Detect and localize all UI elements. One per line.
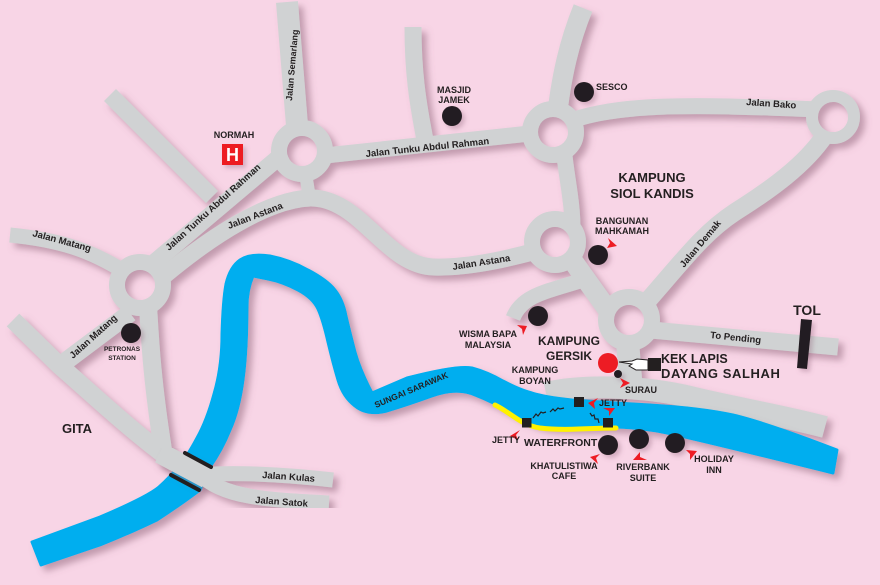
road labels: Jalan Tunku Abdul Rahman [164, 162, 263, 253]
road labels: Jalan Matang [31, 228, 92, 255]
place labels: INN [706, 465, 722, 475]
bridge road and Jalan Kulas / Jalan Satok [160, 453, 333, 503]
road labels: SUNGAI SARAWAK [373, 369, 450, 410]
hospital icon [222, 144, 243, 165]
place labels: JETTY [492, 435, 520, 445]
place labels: WISMA BAPA [459, 329, 517, 339]
place labels: MAHKAMAH [595, 226, 649, 236]
place labels: SUITE [630, 473, 656, 483]
place labels: KAMPUNG [618, 170, 686, 185]
place labels: DAYANG SALHAH [661, 366, 781, 381]
place labels: CAFE [552, 471, 576, 481]
road labels: Jalan Satok [255, 495, 309, 510]
TOL gate [793, 302, 821, 369]
road labels: Jalan Astana [452, 253, 512, 273]
waterfront yellow promenade [495, 405, 616, 429]
place labels: KAMPUNG [512, 365, 558, 375]
place labels: MALAYSIA [465, 340, 512, 350]
bridge lines [171, 453, 211, 490]
place labels: BOYAN [519, 376, 551, 386]
landmark dots [121, 82, 685, 455]
road labels: Jalan Kulas [262, 470, 315, 485]
road network [10, 2, 854, 463]
road labels: Jalan Demak [678, 218, 724, 270]
hospital icon: H [226, 145, 239, 165]
place labels: MASJID [437, 85, 471, 95]
place labels: KHATULISTIWA [530, 461, 598, 471]
place labels: GITA [62, 421, 93, 436]
road labels: Jalan Tunku Abdul Rahman [365, 136, 490, 160]
river: Sungai Sarawak [32, 255, 837, 565]
place labels: STATION [108, 355, 136, 362]
place labels: KEK LAPIS [661, 352, 728, 366]
TOL gate: TOL [793, 302, 821, 318]
place labels: KAMPUNG [538, 334, 600, 348]
icon: pointing hand [619, 358, 661, 371]
place labels: GERSIK [546, 349, 592, 363]
place labels: WATERFRONT [524, 437, 598, 449]
red pointers [510, 238, 697, 464]
place labels: SURAU [625, 385, 657, 395]
place labels: PETRONAS [104, 346, 141, 353]
road labels: Jalan Bako [746, 97, 797, 112]
place labels: NORMAH [214, 130, 254, 140]
place labels: BANGUNAN [596, 216, 648, 226]
place labels: SIOL KANDIS [610, 186, 694, 201]
place labels: SESCO [596, 82, 628, 92]
road labels: Jalan Semarlang [284, 29, 300, 101]
place labels: JAMEK [438, 95, 470, 105]
road labels: Jalan Matang [68, 313, 120, 361]
boat routes [533, 408, 599, 423]
jetty squares [522, 397, 613, 428]
road labels: To Pending [710, 330, 762, 346]
place labels: RIVERBANK [616, 462, 670, 472]
place labels: JETTY [599, 398, 627, 408]
place labels: HOLIDAY [694, 454, 734, 464]
place labels [62, 82, 781, 483]
road labels: Jalan Astana [226, 200, 285, 232]
road labels [31, 29, 797, 510]
Kek Lapis marker [598, 353, 618, 373]
